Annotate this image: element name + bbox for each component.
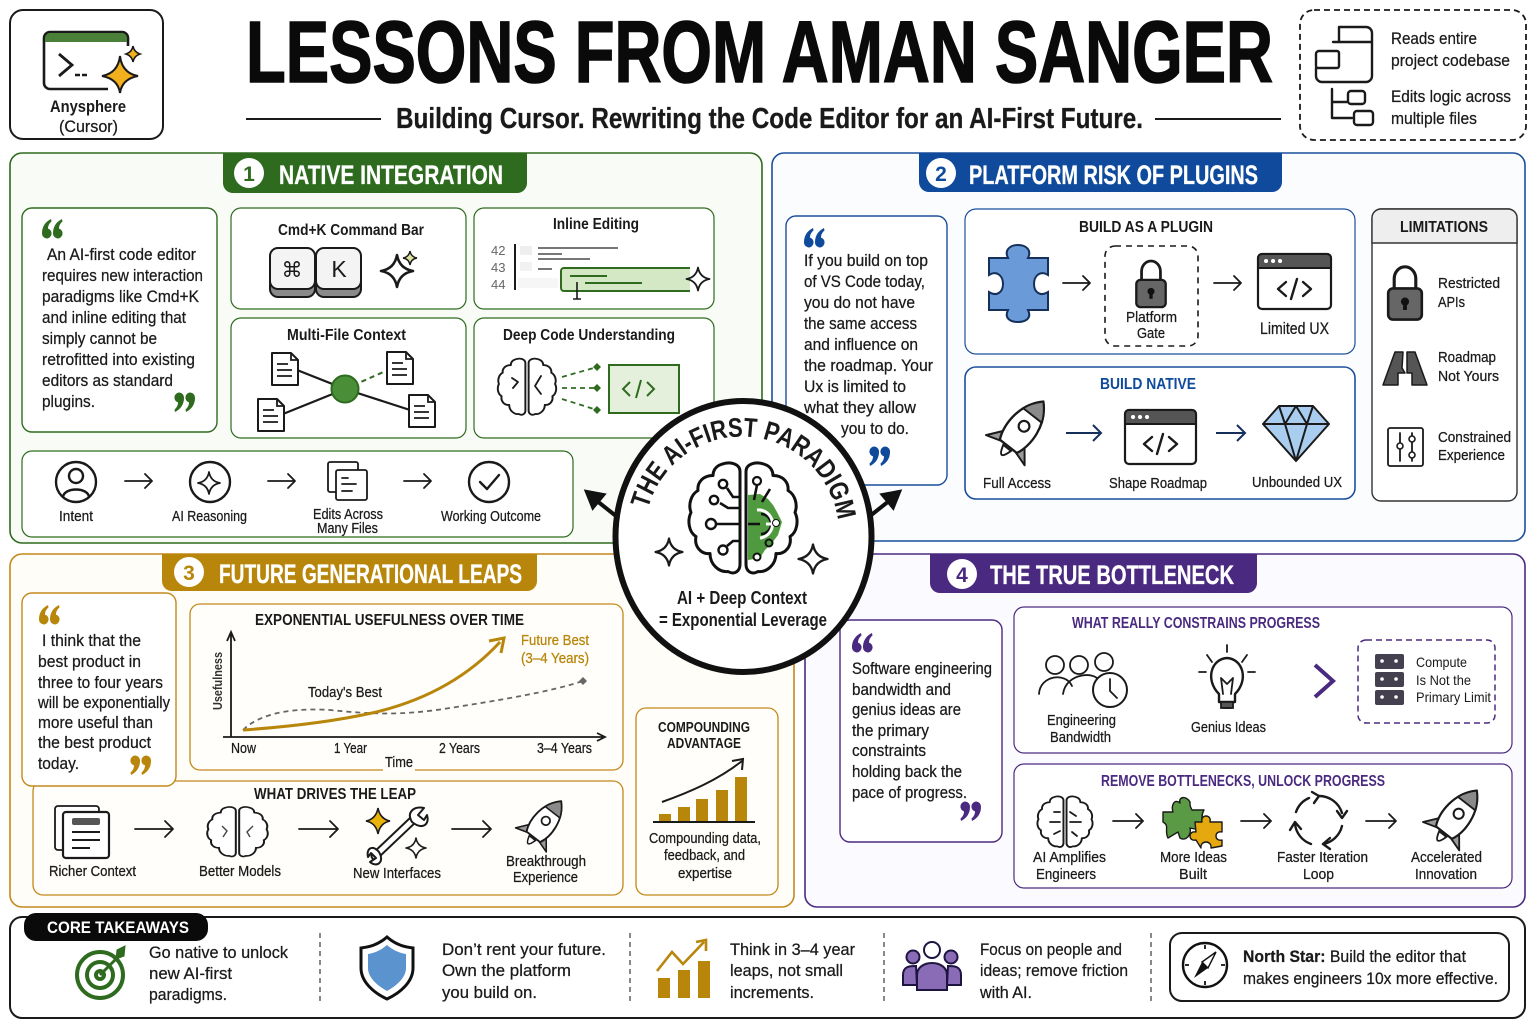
arrow: roadmap to unbounded UX	[1216, 425, 1245, 441]
icon: growth bars	[657, 940, 710, 998]
card: Compounding Advantage: Compounding data,	[649, 831, 761, 847]
arrow: edits to outcome	[404, 474, 431, 488]
card: Cmd+K Command Bar: Cmd+K Command Bar	[278, 222, 424, 239]
arrow: badge to panel 1	[587, 492, 616, 516]
quote: best product in three to four years	[22, 593, 176, 786]
icon: brain with green circuit	[689, 463, 797, 573]
callout: compute is not the primary limit: Primary Limit	[1416, 689, 1491, 705]
heading: Platform Risk tab: PLATFORM RISK OF PLUGINS	[969, 160, 1258, 190]
platform gate	[1105, 246, 1198, 346]
icon: engineering bandwidth people and clock	[1039, 653, 1127, 707]
card: chart exponential usefulness: Future Best	[521, 633, 589, 649]
quote: software engineering bandwidth: holding back the	[852, 763, 962, 781]
icon: iteration cycle	[1290, 792, 1347, 849]
quote: software engineering bandwidth: genius ideas are	[852, 701, 961, 719]
quote: software engineering bandwidth: the primary	[852, 722, 930, 740]
card: chart exponential usefulness: Today's Best	[308, 685, 382, 701]
card: Build Native	[965, 367, 1355, 499]
quote: AI-first code editor: paradigms like Cmd+K	[42, 288, 199, 306]
icon: rocket	[982, 386, 1063, 470]
card: What Drives the Leap	[33, 781, 623, 895]
arrow: rocket to roadmap	[1066, 425, 1101, 441]
panel: Limitations: Experience	[1438, 448, 1505, 464]
subtitle: Building Cursor. Rewriting the Code Editor for an AI-First Future.	[396, 103, 1143, 135]
card: Remove Bottlenecks, Unlock Progress: Built	[1179, 867, 1207, 883]
card: Compounding Advantage: COMPOUNDING	[658, 720, 750, 736]
panel: Limitations: APIs	[1438, 295, 1465, 311]
centre: The AI-First Paradigm badge: = Exponential Leverage	[659, 610, 827, 630]
card: What Drives the Leap: Experience	[513, 870, 578, 886]
card: Inline Editing: 43	[491, 260, 505, 275]
icon: limited UX window	[1258, 254, 1331, 309]
icon: better models brain	[207, 807, 268, 856]
card: Build as a Plugin	[965, 209, 1355, 354]
callout: North Star: North Star: Build the editor that	[1243, 948, 1466, 966]
quote: best product in three to four years: will be exponentially	[37, 694, 171, 712]
arrow: reasoning to edits	[268, 474, 295, 488]
card: What Drives the Leap: Richer Context	[49, 864, 136, 880]
callout: North Star	[1170, 933, 1509, 1001]
panel: Limitations	[1372, 209, 1517, 501]
panel: The True Bottleneck	[805, 554, 1525, 907]
icon: shield	[361, 937, 413, 999]
panel: Limitations: LIMITATIONS	[1400, 219, 1488, 236]
arrow: ideas to iteration	[1241, 814, 1271, 828]
icon: AI amplifies brain	[1037, 796, 1093, 847]
icon: closed road	[1383, 352, 1427, 385]
card: Multi-File Context: Multi-File Context	[287, 327, 407, 344]
takeaway: focus on people: ideas; remove friction	[980, 962, 1128, 980]
quote: AI-first code editor: editors as standard	[42, 372, 173, 390]
takeaway: focus on people	[903, 941, 1128, 1002]
card: chart exponential usefulness: (3–4 Years)	[521, 651, 589, 667]
panel: Native Integration	[10, 153, 762, 543]
arrow: context to models	[135, 821, 173, 837]
card: Multi-File Context	[231, 318, 466, 438]
card: Compounding Advantage: ADVANTAGE	[667, 736, 741, 752]
card: What Really Constrains Progress	[1014, 607, 1512, 753]
card: Build Native: Unbounded UX	[1252, 475, 1342, 491]
heading: Native Integration tab: NATIVE INTEGRATION	[279, 160, 503, 190]
flow: intent to working outcome: AI Reasoning	[172, 509, 247, 525]
card: Build as a Plugin: BUILD AS A PLUGIN	[1079, 219, 1213, 236]
quote: AI-first code editor: requires new interaction	[42, 267, 203, 285]
quote: VS Code platform: Ux is limited to	[804, 378, 906, 396]
card: What Really Constrains Progress: Bandwidth	[1050, 730, 1111, 746]
quote: VS Code platform: the roadmap. Your	[804, 357, 933, 375]
card: Deep Code Understanding: Deep Code Understanding	[503, 327, 675, 344]
quote: VS Code platform: you to do.	[841, 420, 909, 438]
card: Remove Bottlenecks, Unlock Progress: AI Amplifies	[1033, 850, 1106, 866]
icon: breakthrough rocket	[513, 789, 577, 856]
icon: people	[903, 942, 961, 990]
card: Remove Bottlenecks, Unlock Progress: REMOVE BOTTLENECKS, UNLOCK PROGRESS	[1101, 773, 1385, 790]
flow: intent to working outcome: Intent	[59, 509, 93, 525]
icon: AI reasoning	[190, 462, 230, 502]
callout: codebase reads and edits: Reads entire	[1391, 30, 1477, 48]
arrow: badge to panel 2	[870, 492, 899, 516]
card: chart exponential usefulness: EXPONENTIAL USEFULNESS OVER TIME	[255, 612, 524, 629]
card: chart exponential usefulness: Now	[231, 741, 256, 757]
quote: VS Code platform: of VS Code today,	[804, 273, 925, 291]
callout: compute is not the primary limit: Is Not the	[1416, 672, 1471, 688]
panel: Future Generational Leaps	[10, 554, 794, 907]
takeaway: go native	[77, 944, 289, 1004]
heading: True Bottleneck tab	[930, 554, 1257, 593]
heading: True Bottleneck tab: THE TRUE BOTTLENECK	[990, 560, 1234, 590]
takeaway: think in leaps: increments.	[730, 984, 814, 1002]
callout: codebase reads and edits: project codebase	[1391, 52, 1510, 70]
takeaway: own the platform: Own the platform	[442, 962, 571, 980]
takeaway: own the platform: Don’t rent your future.	[442, 941, 606, 959]
quote: VS Code platform: you do not have	[804, 294, 915, 312]
panel: Limitations: Roadmap	[1438, 350, 1496, 366]
icon: edits across files	[328, 462, 367, 500]
card: chart exponential usefulness: Usefulness	[211, 652, 225, 710]
arrow: models to interfaces	[299, 821, 338, 837]
card: Deep Code Understanding	[474, 318, 714, 438]
icon: working outcome check	[469, 462, 509, 502]
panel: Limitations: Not Yours	[1438, 369, 1499, 385]
quote: AI-first code editor: simply cannot be	[42, 330, 157, 348]
flow: intent to working outcome: Edits Across	[313, 507, 383, 523]
card: chart exponential usefulness: 3–4 Years	[537, 741, 592, 757]
card: Inline Editing: 44	[491, 277, 505, 292]
heading: Core Takeaways pill: CORE TAKEAWAYS	[47, 918, 189, 937]
callout: codebase reads and edits: Edits logic across	[1391, 88, 1511, 106]
callout: compute is not the primary limit: Compute	[1416, 654, 1467, 670]
card: Compounding Advantage	[636, 708, 778, 895]
heading: Core Takeaways pill	[24, 913, 208, 941]
heading: Native Integration tab: 1	[243, 163, 255, 186]
card: What Drives the Leap: New Interfaces	[353, 866, 441, 882]
takeaway: think in leaps	[657, 940, 855, 1002]
arrow: plugin to gate	[1063, 276, 1090, 290]
quote: software engineering bandwidth: Software engineering	[852, 660, 992, 678]
quote: best product in three to four years: three to four years	[38, 674, 163, 692]
quote: VS Code platform: the same access	[804, 315, 917, 333]
card: What Drives the Leap: Better Models	[199, 864, 281, 880]
quote: AI-first code editor: retrofitted into existing	[42, 351, 195, 369]
icon: diamond	[1263, 406, 1329, 461]
takeaway: own the platform: you build on.	[442, 984, 537, 1002]
card: Build Native: Shape Roadmap	[1109, 476, 1207, 492]
card: Remove Bottlenecks, Unlock Progress: Loop	[1303, 867, 1334, 883]
panel: Limitations: Restricted	[1438, 276, 1500, 292]
heading: Native Integration tab	[223, 153, 527, 193]
icon: genius ideas bulb	[1199, 645, 1255, 708]
quote: VS Code platform: If you build on top	[804, 252, 928, 270]
card: Remove Bottlenecks, Unlock Progress: Engineers	[1036, 867, 1096, 883]
quote: software engineering bandwidth: pace of progress.	[852, 784, 967, 802]
takeaway: go native: Go native to unlock	[149, 944, 289, 962]
icon: compass	[1183, 943, 1227, 987]
quote: VS Code platform: and influence on	[804, 336, 918, 354]
quote: software engineering bandwidth: constraints	[852, 742, 926, 760]
platform gate: Gate	[1137, 326, 1165, 342]
arrow: engineers to ideas	[1113, 814, 1143, 828]
card: What Really Constrains Progress: WHAT REALLY CONSTRAINS PROGRESS	[1072, 615, 1320, 632]
icon: sliders	[1388, 428, 1423, 466]
icon: richer context docs	[55, 806, 109, 858]
card: Cmd+K Command Bar	[231, 208, 466, 309]
platform gate: Platform	[1126, 310, 1177, 326]
takeaway: think in leaps: leaps, not small	[730, 962, 843, 980]
card: Remove Bottlenecks, Unlock Progress: Accelerated	[1411, 850, 1482, 866]
card: Build Native: BUILD NATIVE	[1100, 376, 1196, 393]
icon: new interfaces wrench	[366, 808, 428, 864]
flow: intent to working outcome: Working Outcome	[441, 509, 541, 525]
quote: best product in three to four years: more useful than	[38, 714, 153, 732]
icon: puzzle piece	[989, 245, 1048, 322]
icon: target	[77, 946, 125, 998]
card: chart exponential usefulness: 2 Years	[439, 741, 480, 757]
icon: shape roadmap window	[1125, 410, 1196, 464]
arrow: gate to limited UX	[1214, 276, 1241, 290]
callout: codebase reads and edits	[1300, 10, 1526, 140]
card: chart exponential usefulness	[190, 604, 623, 772]
icon: restricted APIs lock	[1388, 267, 1422, 320]
quote: software engineering bandwidth	[840, 620, 1002, 842]
heading: Platform Risk tab	[919, 153, 1282, 192]
centre: The AI-First Paradigm badge: AI + Deep Context	[677, 588, 807, 608]
quote: best product in three to four years: today.	[38, 755, 79, 773]
icon: greater than chevron	[1315, 665, 1333, 697]
takeaway: think in leaps: Think in 3–4 year	[730, 941, 855, 959]
heading: Future Leaps tab: FUTURE GENERATIONAL LEAPS	[219, 559, 522, 589]
takeaway: focus on people: with AI.	[979, 984, 1032, 1002]
quote: best product in three to four years: I think that the	[42, 632, 141, 650]
card: Remove Bottlenecks, Unlock Progress	[1014, 764, 1512, 888]
card: Remove Bottlenecks, Unlock Progress: Faster Iteration	[1277, 850, 1368, 866]
card: Inline Editing	[474, 208, 714, 309]
takeaway: go native: paradigms.	[149, 986, 227, 1004]
quote: VS Code platform	[786, 216, 947, 485]
takeaway: own the platform	[361, 937, 606, 1002]
quote: AI-first code editor	[22, 208, 217, 432]
arrow: iteration to innovation	[1366, 814, 1396, 828]
card: What Drives the Leap: WHAT DRIVES THE LEAP	[254, 786, 416, 803]
icon: accelerated innovation rocket	[1420, 776, 1495, 855]
card: Build as a Plugin: Limited UX	[1260, 320, 1329, 338]
card: What Drives the Leap: Breakthrough	[506, 854, 586, 870]
quote: AI-first code editor: plugins.	[42, 393, 95, 411]
card: Inline Editing: 42	[491, 243, 505, 258]
card: Build Native: Full Access	[983, 476, 1051, 492]
card: Remove Bottlenecks, Unlock Progress: More Ideas	[1160, 850, 1227, 866]
quote: best product in three to four years: best product in	[38, 653, 141, 671]
flow: intent to working outcome	[22, 451, 573, 537]
quote: AI-first code editor: and inline editing that	[42, 309, 186, 327]
logo: Anysphere (Cursor): (Cursor)	[59, 118, 118, 136]
callout: compute is not the primary limit	[1358, 640, 1495, 723]
card: What Really Constrains Progress: Genius Ideas	[1191, 720, 1266, 736]
takeaway: go native: new AI-first	[149, 965, 232, 983]
card: What Really Constrains Progress: Engineering	[1047, 713, 1116, 729]
arrow: interfaces to experience	[452, 821, 491, 837]
card: Cmd+K Command Bar: ⌘	[282, 258, 302, 282]
heading: Platform Risk tab: 2	[935, 163, 947, 186]
quote: VS Code platform: what they allow	[803, 399, 916, 417]
icon: codebase folders	[1316, 27, 1373, 125]
logo: Anysphere (Cursor)	[10, 10, 163, 139]
callout: codebase reads and edits: multiple files	[1391, 110, 1477, 128]
centre: The AI-First Paradigm badge	[584, 398, 902, 675]
centre: The AI-First Paradigm badge: THE AI-FIRST PARADIGM	[630, 418, 856, 519]
panel: Platform Risk of Plugins	[772, 153, 1525, 541]
flow: intent to working outcome: Many Files	[317, 521, 378, 537]
card: Cmd+K Command Bar: K	[331, 256, 347, 282]
card: Inline Editing: Inline Editing	[553, 216, 639, 233]
icon: more ideas puzzle	[1163, 798, 1222, 848]
takeaway: focus on people: Focus on people and	[980, 941, 1122, 959]
card: chart exponential usefulness: Time	[385, 755, 413, 771]
card: chart exponential usefulness: 1 Year	[334, 741, 367, 757]
quote: software engineering bandwidth: bandwidth and	[852, 681, 951, 699]
arrow: intent to reasoning	[125, 474, 152, 488]
icon: intent user	[56, 462, 96, 502]
heading: Future Leaps tab	[162, 554, 537, 591]
card: Compounding Advantage: feedback, and	[664, 848, 745, 864]
callout: North Star: makes engineers 10x more effective.	[1243, 970, 1498, 988]
card: Compounding Advantage: expertise	[678, 866, 732, 882]
quote: best product in three to four years: the best product	[38, 734, 151, 752]
panel: Core Takeaways	[10, 913, 1525, 1018]
logo: Anysphere (Cursor): Anysphere	[50, 98, 126, 116]
panel: Limitations: Constrained	[1438, 430, 1511, 446]
heading: True Bottleneck tab: 4	[956, 564, 968, 587]
card: Remove Bottlenecks, Unlock Progress: Innovation	[1415, 867, 1477, 883]
heading: Future Leaps tab: 3	[183, 562, 195, 585]
quote: AI-first code editor: An AI-first code editor	[47, 246, 196, 264]
